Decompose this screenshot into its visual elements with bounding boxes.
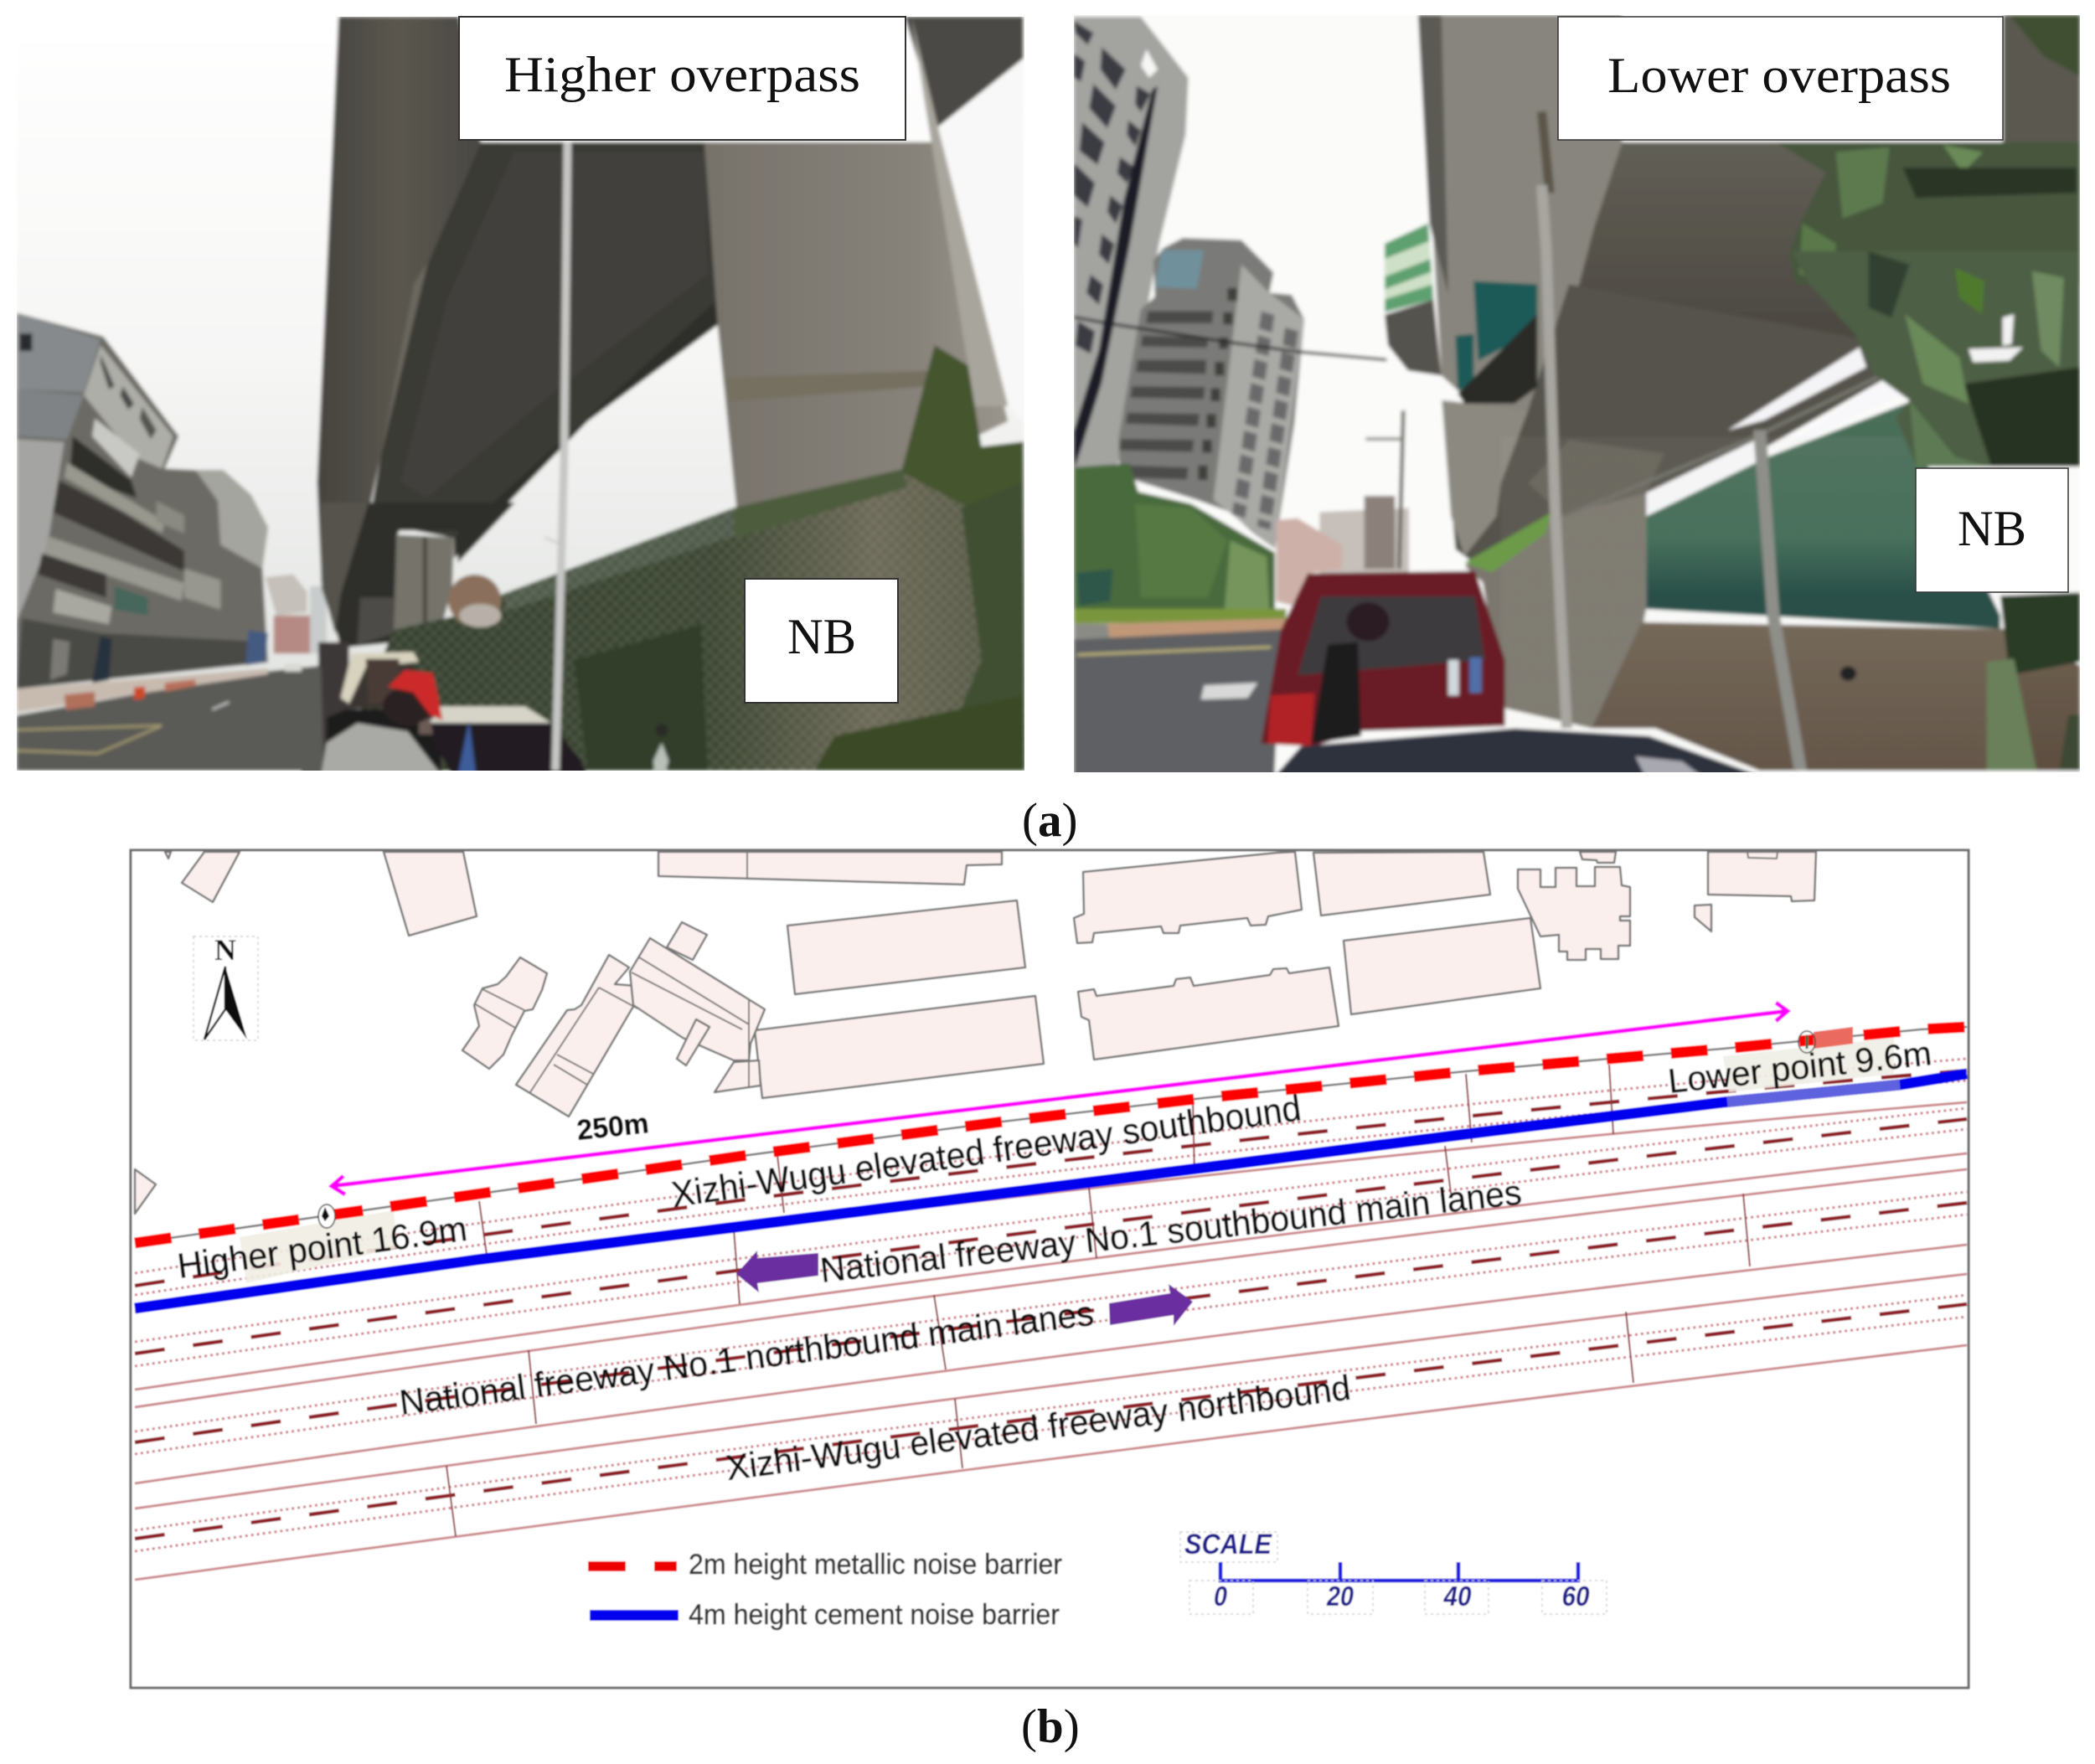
map panel [131,850,1969,1688]
label: NB on higher overpass photo [745,579,898,703]
scale bar: 20 [1326,1581,1355,1612]
road lane lines [135,1059,1967,1580]
text: 250m: 250m [575,1107,650,1147]
buildings [135,852,1816,1214]
marker: higher point [318,1204,335,1228]
north arrow [194,933,258,1040]
legend [588,1549,1062,1631]
north arrow: N [214,933,236,967]
scale bar: 60 [1561,1581,1590,1612]
text: elevated freeway northbound: Xizhi-Wugu elevated freeway northbound [724,1368,1353,1488]
text: elevated freeway southbound: Xizhi-Wugu elevated freeway southbound [669,1088,1303,1215]
label: NB on lower overpass photo [1916,468,2068,592]
legend: 2m height metallic noise barrier [689,1549,1062,1581]
label backdrops [240,1038,1894,1283]
label: NB on lower overpass photo: NB [1958,501,2026,556]
marker: lower point [1798,1031,1815,1053]
text: national freeway southbound: National freeway No.1 southbound main lanes [818,1172,1524,1290]
text: lower point: Lower point 9.6m [1666,1034,1933,1101]
scale bar [1180,1529,1607,1614]
legend: 4m height cement noise barrier [689,1599,1060,1631]
label: Lower overpass: Lower overpass [1607,48,1951,103]
metallic noise barrier (red dashed) [135,1027,1967,1243]
label: Higher overpass: Higher overpass [504,47,860,102]
scale bar: 0 [1214,1581,1228,1612]
cement noise barrier (blue) [135,1074,1967,1308]
scale bar: 40 [1443,1581,1472,1612]
label: Lower overpass [1558,17,2003,140]
label: NB on higher overpass photo: NB [787,609,856,664]
arrow: northbound direction (purple) [1109,1284,1193,1326]
text: higher point: Higher point 16.9m [175,1209,469,1286]
scale bar: SCALE [1184,1529,1272,1560]
caption (b): (b) [1021,1700,1080,1753]
text: national freeway northbound: National freeway No.1 northbound main lanes [397,1293,1096,1422]
arrow: southbound direction (purple) [736,1251,818,1292]
label: Higher overpass [459,17,906,140]
arrow: 250m span (magenta) [332,1003,1788,1194]
caption (a): (a) [1022,794,1077,847]
photo: higher overpass [17,17,1025,775]
photo: lower overpass [1074,15,2080,776]
